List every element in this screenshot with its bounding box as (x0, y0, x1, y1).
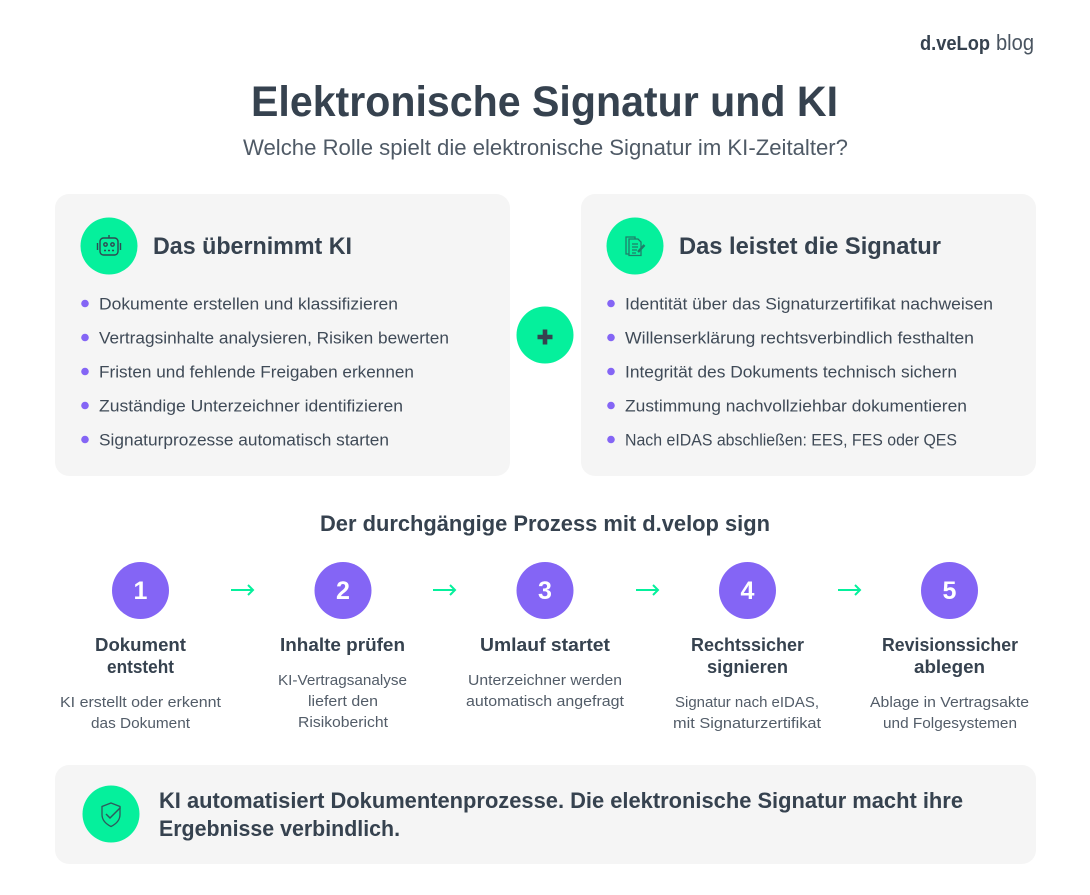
panel: Das leistet die Signatur (581, 194, 1036, 476)
step 4: signieren (707, 657, 788, 677)
step 5: und Folgesystemen (883, 715, 1017, 732)
callout: conclusion (55, 765, 1036, 864)
bullet list (81, 294, 449, 450)
step 1: Dokument (95, 635, 186, 655)
step 5: 5 (943, 577, 957, 605)
step 2: 2 (336, 577, 350, 605)
bullet list (607, 294, 993, 450)
process heading: Der durchgängige Prozess mit d.velop sign (320, 511, 770, 536)
heading: Das übernimmt KI (153, 233, 352, 260)
step 2 (278, 562, 407, 731)
arrow 1 (231, 585, 253, 595)
step 1: KI erstellt oder erkennt (60, 694, 222, 711)
icon: signed document (606, 218, 664, 274)
step 4: Rechtssicher (691, 635, 804, 655)
bullet list: Signaturprozesse automatisch starten (99, 430, 389, 450)
step 2: Inhalte prüfen (280, 635, 405, 655)
step 5: Revisionssicher (882, 635, 1018, 655)
bullet list: Vertragsinhalte analysieren, Risiken bewerten (99, 328, 449, 348)
step 3: 3 (538, 577, 552, 605)
step 1: das Dokument (91, 715, 191, 732)
step 1: 1 (134, 577, 148, 605)
step 4: Signatur nach eIDAS, (675, 694, 819, 711)
bullet list: Dokumente erstellen und klassifizieren (99, 294, 398, 314)
heading: Das leistet die Signatur (679, 233, 941, 260)
icon: plus connector (516, 306, 574, 364)
step 3: Unterzeichner werden (468, 672, 622, 689)
step 4: mit Signaturzertifikat (673, 715, 822, 732)
callout text: KI automatisiert Dokumentenprozesse. Die elektronische Signatur macht ihre (159, 788, 963, 813)
arrow 4 (838, 585, 860, 595)
step 1: entsteht (107, 657, 174, 677)
arrow 3 (636, 585, 658, 595)
step 3: Umlauf startet (480, 635, 610, 655)
bullet list: Zuständige Unterzeichner identifizieren (99, 396, 403, 416)
arrow 2 (433, 585, 455, 595)
bullet list: Integrität des Dokuments technisch sichern (625, 362, 957, 382)
callout: conclusion: Ergebnisse verbindlich. (159, 816, 400, 841)
bullet list: Zustimmung nachvollziehbar dokumentieren (625, 396, 967, 416)
step 5: ablegen (914, 657, 985, 677)
step 5 (870, 562, 1029, 732)
step 3: automatisch angefragt (466, 693, 625, 710)
bullet list: Nach eIDAS abschließen: EES, FES oder QES (625, 430, 957, 450)
step 4: 4 (741, 577, 755, 605)
step 5: Ablage in Vertragsakte (870, 694, 1029, 711)
step 4 (673, 562, 822, 732)
bullet list: Fristen und fehlende Freigaben erkennen (99, 362, 414, 382)
logo: d.velop blog (920, 30, 1034, 55)
subtitle: Welche Rolle spielt die elektronische Signatur im KI-Zeitalter? (243, 135, 848, 160)
step 2: KI-Vertragsanalyse (278, 672, 407, 689)
logo: d.velop blog: d.veLop (920, 33, 990, 55)
panel: Das übernimmt KI (55, 194, 510, 476)
bullet list: Willenserklärung rechtsverbindlich festhalten (625, 328, 974, 348)
step 2: Risikobericht (298, 714, 389, 731)
icon: robot (80, 218, 138, 274)
step 1 (60, 562, 222, 732)
icon: shield check (82, 786, 140, 842)
step 3 (466, 562, 625, 710)
title: Elektronische Signatur und KI (251, 78, 838, 126)
logo: d.velop blog: blog (996, 30, 1034, 55)
bullet list: Identität über das Signaturzertifikat nachweisen (625, 294, 993, 314)
step 2: liefert den (308, 693, 378, 710)
